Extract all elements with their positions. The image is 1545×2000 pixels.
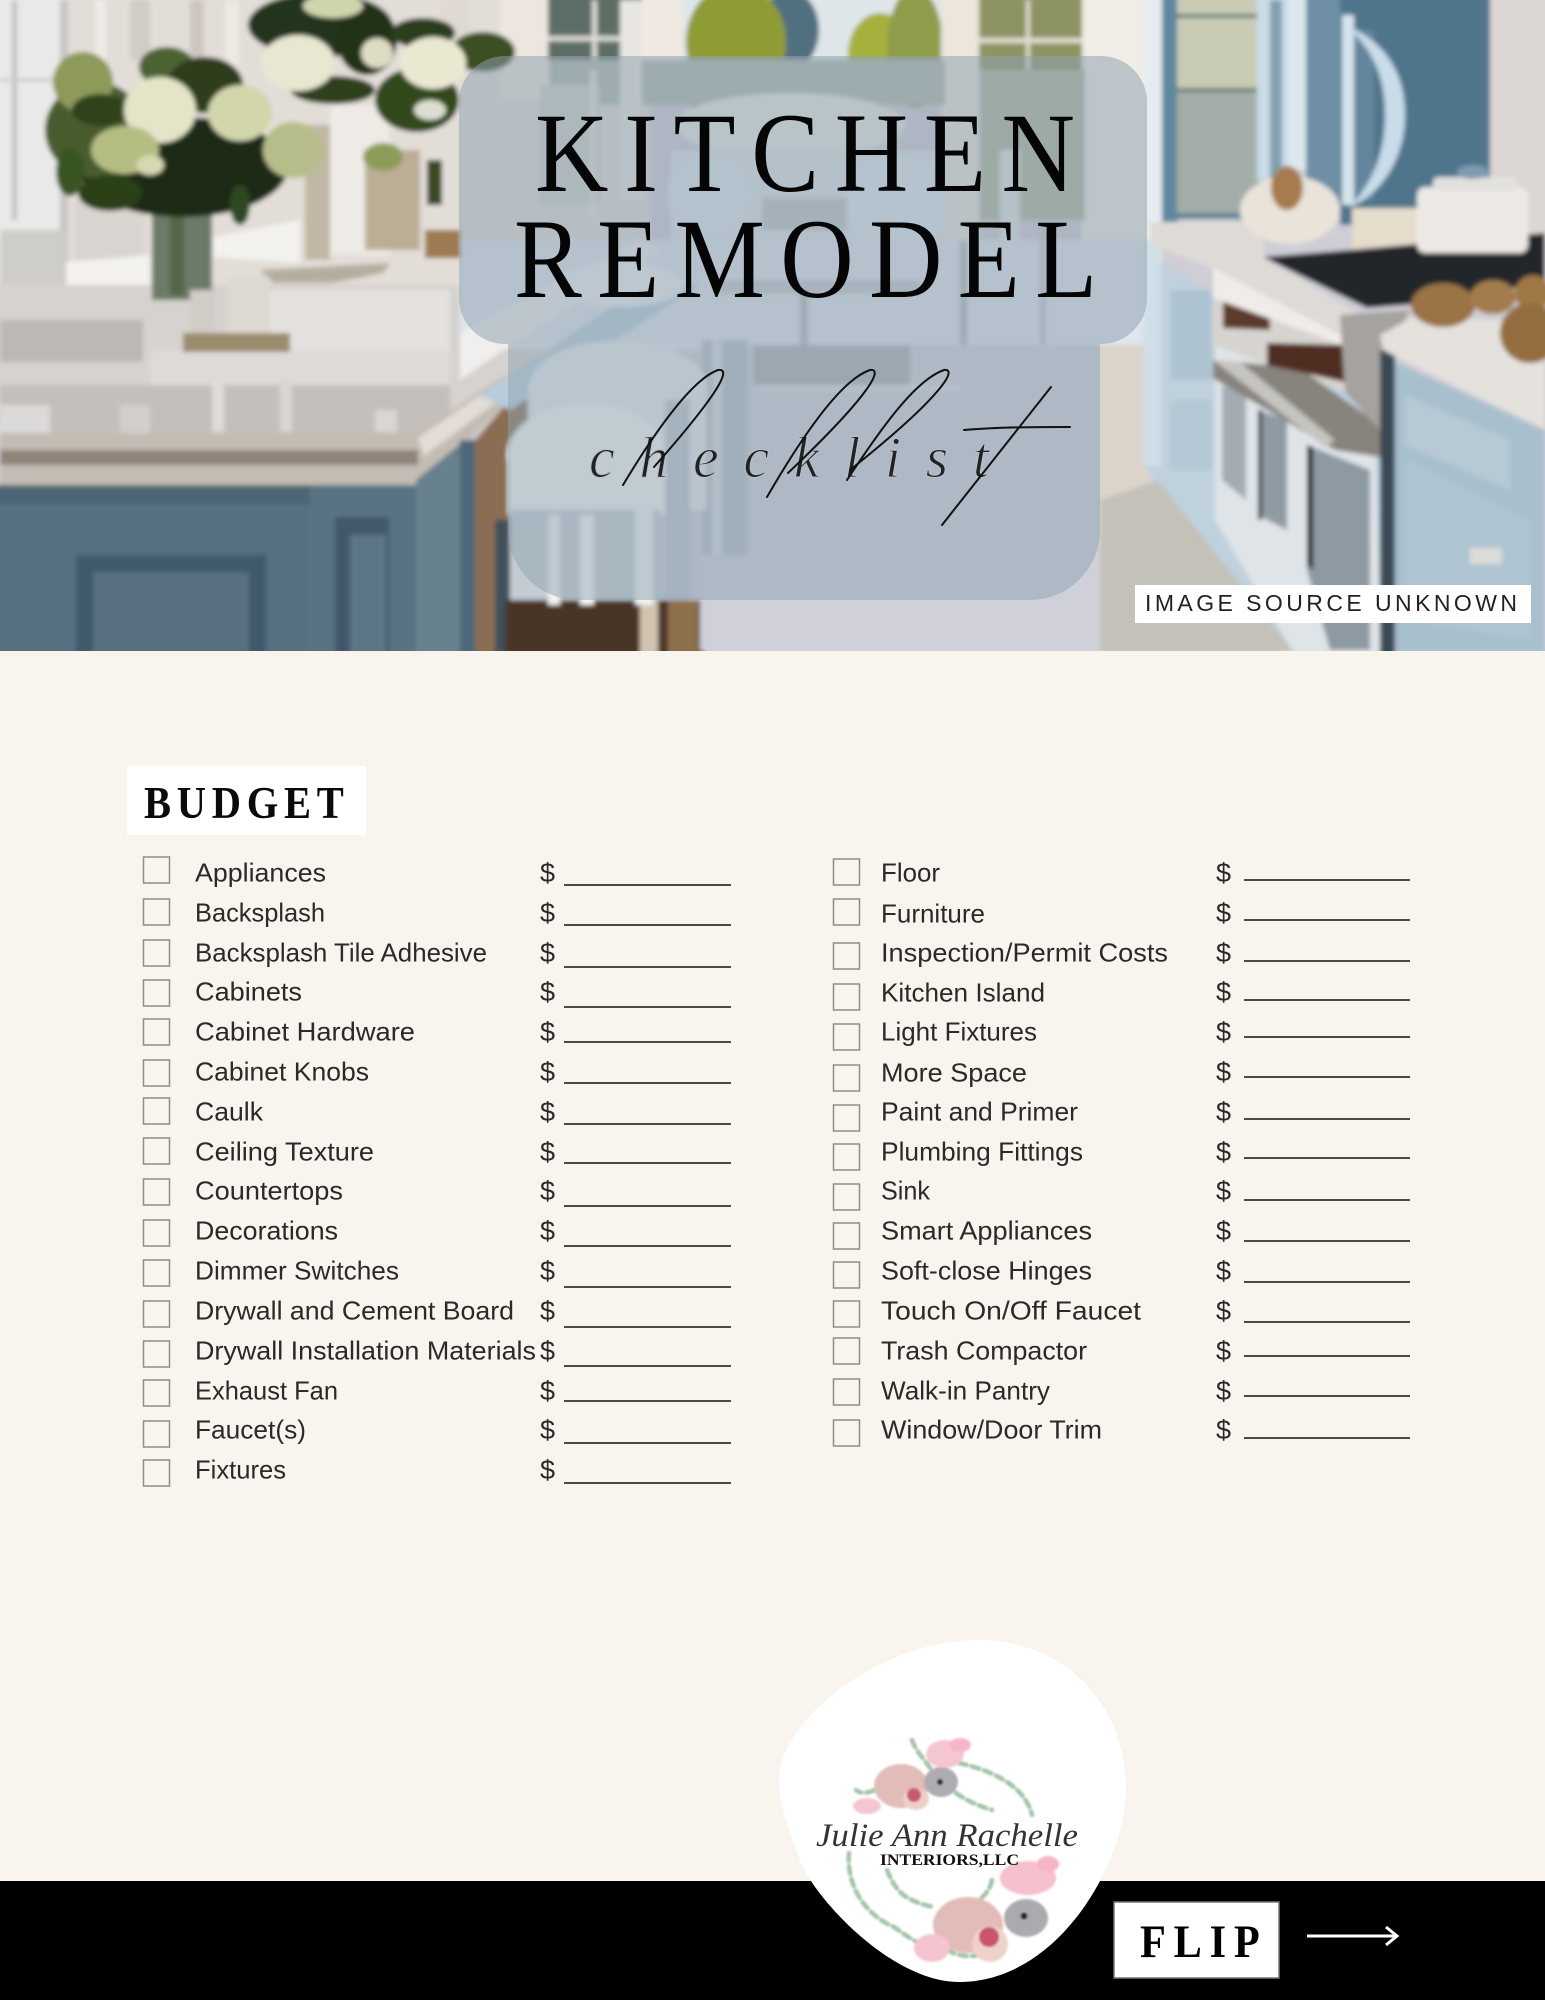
row: Exhaust Fan: Exhaust Fan: [195, 1376, 338, 1406]
row: Walk-in Pantry: Walk-in Pantry: [881, 1376, 1050, 1406]
title: REMODEL: [514, 197, 1097, 322]
row: Kitchen Island: [834, 977, 1410, 1010]
row: Smart Appliances: [834, 1216, 1410, 1249]
row: Cabinet Knobs: $: [540, 1057, 555, 1087]
arrow: next page: [1307, 1927, 1397, 1945]
row: Cabinet Hardware: Cabinet Hardware: [195, 1017, 415, 1047]
title: [514, 91, 1097, 322]
row: Paint and Primer: [834, 1097, 1410, 1131]
row: Furniture: $: [1216, 898, 1231, 928]
icon: floral wreath: [849, 1738, 1059, 1962]
row: Drywall Installation Materials: $: [540, 1336, 555, 1366]
script subtitle: checklist: [589, 370, 1070, 525]
title: KITCHEN: [535, 91, 1075, 216]
flip button: FLIP: [1140, 1915, 1260, 1968]
footer black bar: [0, 1881, 1545, 2000]
row: Caulk: $: [540, 1097, 555, 1127]
row: Light Fixtures: $: [1216, 1017, 1231, 1047]
row: Cabinet Knobs: Cabinet Knobs: [195, 1057, 369, 1087]
row: Floor: [834, 858, 1410, 888]
row: Countertops: Countertops: [195, 1176, 343, 1206]
row: Cabinets: $: [540, 977, 555, 1007]
row: Exhaust Fan: $: [540, 1376, 555, 1406]
header photo: blue and white kitchen: [0, 0, 1545, 670]
row: Plumbing Fittings: Plumbing Fittings: [881, 1137, 1083, 1167]
row: Decorations: [144, 1216, 731, 1246]
row: Faucet(s): [144, 1415, 731, 1447]
row: Touch On/Off Faucet: [834, 1296, 1410, 1327]
row: Backsplash: $: [540, 898, 555, 928]
row: More Space: More Space: [881, 1058, 1027, 1088]
row: More Space: $: [1216, 1057, 1231, 1087]
row: Floor: Floor: [881, 858, 940, 888]
row: Drywall Installation Materials: Drywall Installation Materials: [195, 1336, 536, 1366]
title panel: upper translucent rounded panel: [459, 56, 1147, 344]
logo badge: [779, 1640, 1126, 1982]
row: Light Fixtures: [834, 1017, 1410, 1050]
subtitle panel: lower translucent rounded panel: [508, 344, 1100, 600]
row: Dimmer Switches: [144, 1256, 731, 1287]
row: Kitchen Island: $: [1216, 977, 1231, 1007]
row: Soft-close Hinges: Soft-close Hinges: [881, 1256, 1092, 1286]
row: Cabinets: Cabinets: [195, 977, 302, 1007]
row: Window/Door Trim: $: [1216, 1415, 1231, 1445]
row: Inspection/Permit Costs: [834, 938, 1410, 969]
row: Faucet(s): $: [540, 1415, 555, 1445]
row: Backsplash Tile Adhesive: [144, 938, 731, 968]
row: Caulk: [144, 1097, 731, 1127]
row: Kitchen Island: Kitchen Island: [881, 978, 1045, 1008]
row: Soft-close Hinges: $: [1216, 1256, 1231, 1286]
row: Ceiling Texture: [144, 1137, 731, 1167]
row: Cabinet Knobs: [144, 1057, 731, 1087]
row: Ceiling Texture: $: [540, 1137, 555, 1167]
row: Backsplash: [144, 898, 731, 928]
row: Sink: $: [1216, 1176, 1231, 1206]
row: Touch On/Off Faucet: $: [1216, 1296, 1231, 1326]
image credit tag: [1135, 585, 1531, 623]
row: Window/Door Trim: [834, 1415, 1410, 1446]
logo name: Julie Ann Rachelle: [816, 1818, 1078, 1854]
left checklist column: [144, 857, 731, 1486]
row: Paint and Primer: Paint and Primer: [881, 1097, 1078, 1127]
row: Drywall and Cement Board: $: [540, 1296, 555, 1326]
row: Decorations: Decorations: [195, 1216, 338, 1246]
flip button: [1114, 1902, 1279, 1978]
row: Plumbing Fittings: $: [1216, 1137, 1231, 1167]
row: Faucet(s): Faucet(s): [195, 1415, 306, 1445]
row: Dimmer Switches: Dimmer Switches: [195, 1256, 399, 1286]
row: Light Fixtures: Light Fixtures: [881, 1017, 1037, 1047]
row: Touch On/Off Faucet: Touch On/Off Faucet: [881, 1296, 1142, 1326]
row: Cabinets: [144, 977, 731, 1007]
row: Dimmer Switches: $: [540, 1256, 555, 1286]
row: Walk-in Pantry: $: [1216, 1376, 1231, 1406]
row: Countertops: $: [540, 1176, 555, 1206]
script subtitle: checklist: checklist: [589, 425, 991, 490]
row: Furniture: Furniture: [881, 899, 985, 929]
row: Backsplash: Backsplash: [195, 898, 325, 928]
row: Inspection/Permit Costs: $: [1216, 938, 1231, 968]
logo subtitle: INTERIORS,LLC: [880, 1852, 1019, 1869]
image credit tag: IMAGE SOURCE UNKNOWN: [1145, 590, 1517, 616]
row: Backsplash Tile Adhesive: Backsplash Tile Adhesive: [195, 938, 487, 968]
row: Fixtures: [144, 1455, 731, 1486]
row: Fixtures: $: [540, 1455, 555, 1485]
row: Trash Compactor: Trash Compactor: [881, 1336, 1087, 1366]
row: Inspection/Permit Costs: Inspection/Permit Costs: [881, 938, 1168, 968]
row: Furniture: [834, 898, 1410, 929]
row: Paint and Primer: $: [1216, 1097, 1231, 1127]
row: Plumbing Fittings: [834, 1137, 1410, 1170]
row: Backsplash Tile Adhesive: $: [540, 938, 555, 968]
row: Appliances: [144, 857, 731, 888]
row: Appliances: $: [540, 858, 555, 888]
row: Drywall Installation Materials: [144, 1336, 731, 1367]
row: Ceiling Texture: Ceiling Texture: [195, 1137, 374, 1167]
right checklist column: [834, 858, 1410, 1446]
row: Sink: Sink: [881, 1176, 931, 1206]
row: More Space: [834, 1057, 1410, 1091]
row: Caulk: Caulk: [195, 1097, 264, 1127]
budget heading: [127, 766, 366, 835]
row: Floor: $: [1216, 858, 1231, 888]
row: Decorations: $: [540, 1216, 555, 1246]
row: Countertops: [144, 1176, 731, 1206]
budget heading: BUDGET: [144, 779, 344, 829]
row: Cabinet Hardware: [144, 1017, 731, 1047]
row: Cabinet Hardware: $: [540, 1017, 555, 1047]
row: Soft-close Hinges: [834, 1256, 1410, 1288]
row: Smart Appliances: $: [1216, 1216, 1231, 1246]
row: Window/Door Trim: Window/Door Trim: [881, 1415, 1102, 1445]
row: Fixtures: Fixtures: [195, 1455, 286, 1485]
row: Appliances: Appliances: [195, 858, 326, 888]
row: Exhaust Fan: [144, 1376, 731, 1406]
row: Sink: [834, 1176, 1410, 1210]
row: Walk-in Pantry: [834, 1376, 1410, 1406]
row: Trash Compactor: [834, 1336, 1410, 1366]
row: Drywall and Cement Board: Drywall and Cement Board: [195, 1296, 514, 1326]
row: Trash Compactor: $: [1216, 1336, 1231, 1366]
row: Smart Appliances: Smart Appliances: [881, 1216, 1092, 1246]
row: Drywall and Cement Board: [144, 1296, 731, 1327]
